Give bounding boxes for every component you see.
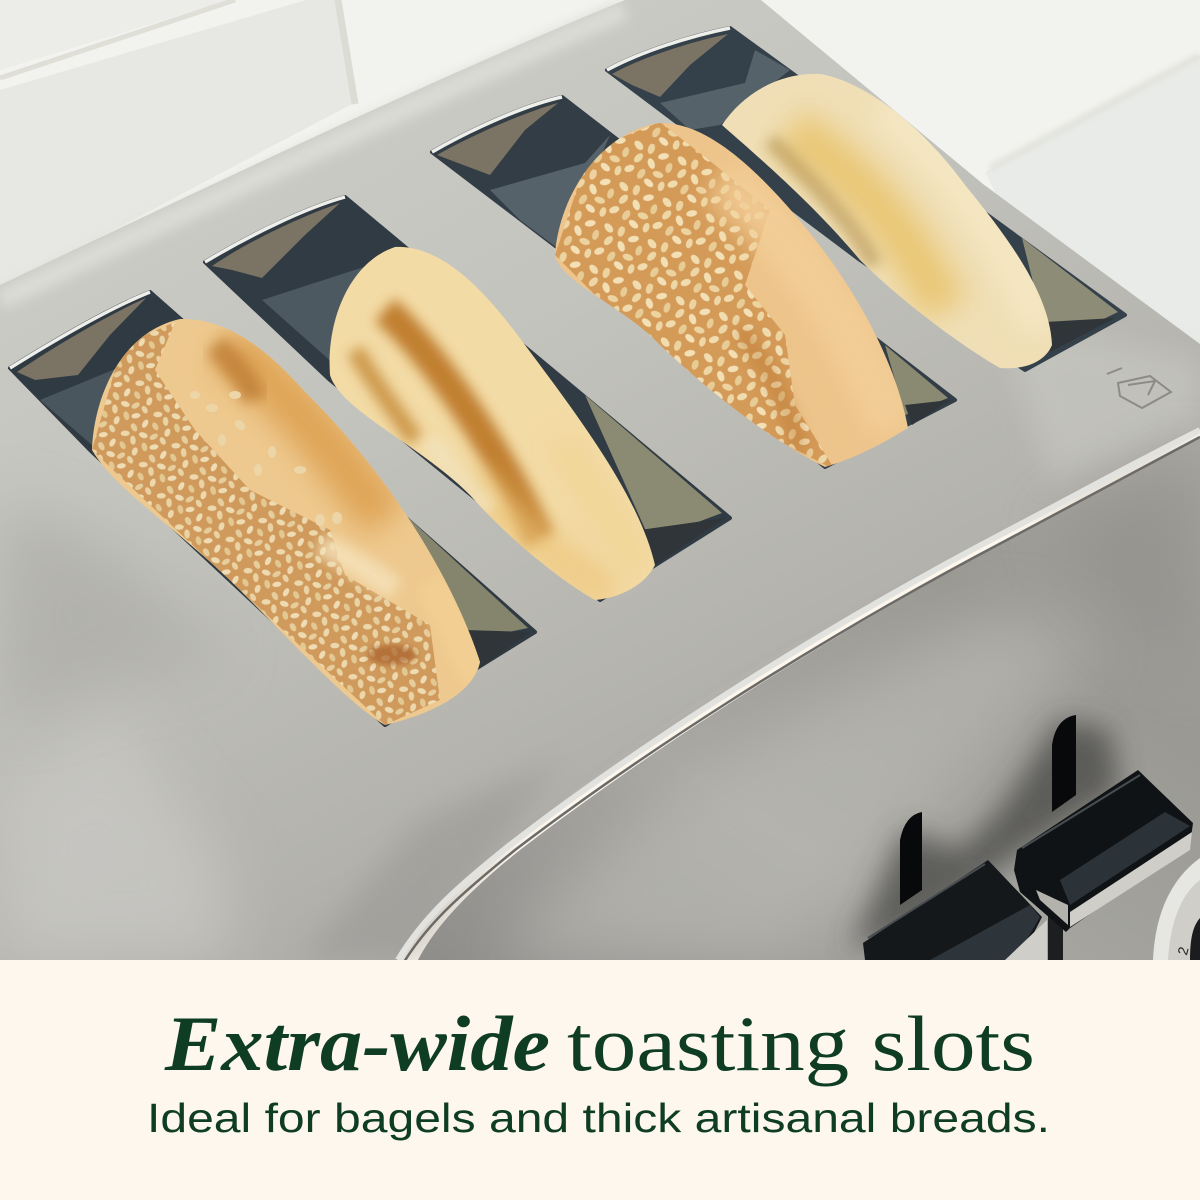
bagel 4 xyxy=(722,74,1052,368)
caption panel xyxy=(0,960,1200,1200)
heading: Extra-wide xyxy=(164,1000,550,1087)
toaster front face xyxy=(418,436,1200,960)
lever shadow xyxy=(850,720,1120,950)
subheading: Ideal for bagels and thick artisanal breads. xyxy=(147,1095,1050,1141)
slot 3 xyxy=(432,97,955,467)
toaster top plate xyxy=(0,0,1200,960)
front face upper shade xyxy=(1040,440,1194,616)
front face light band xyxy=(500,610,1100,960)
plate highlight sheen xyxy=(6,751,224,960)
slot 4 xyxy=(607,28,1125,370)
bagel 2 xyxy=(320,240,665,605)
browning dial xyxy=(1153,858,1200,960)
slot 1 xyxy=(10,292,535,725)
bagel 1 xyxy=(85,310,485,730)
tiled wall background xyxy=(0,0,1200,344)
bagel 3 xyxy=(555,123,908,467)
lever right xyxy=(1014,715,1193,960)
lever left xyxy=(863,812,1047,960)
chrome trim edge xyxy=(398,430,1200,960)
icon: brand logo on plate xyxy=(1107,368,1171,408)
dial numeral: 2 xyxy=(1174,945,1192,957)
back edge bevel xyxy=(0,10,625,300)
heading continuation: toasting slots xyxy=(567,1000,1035,1087)
slot 2 xyxy=(205,197,730,600)
